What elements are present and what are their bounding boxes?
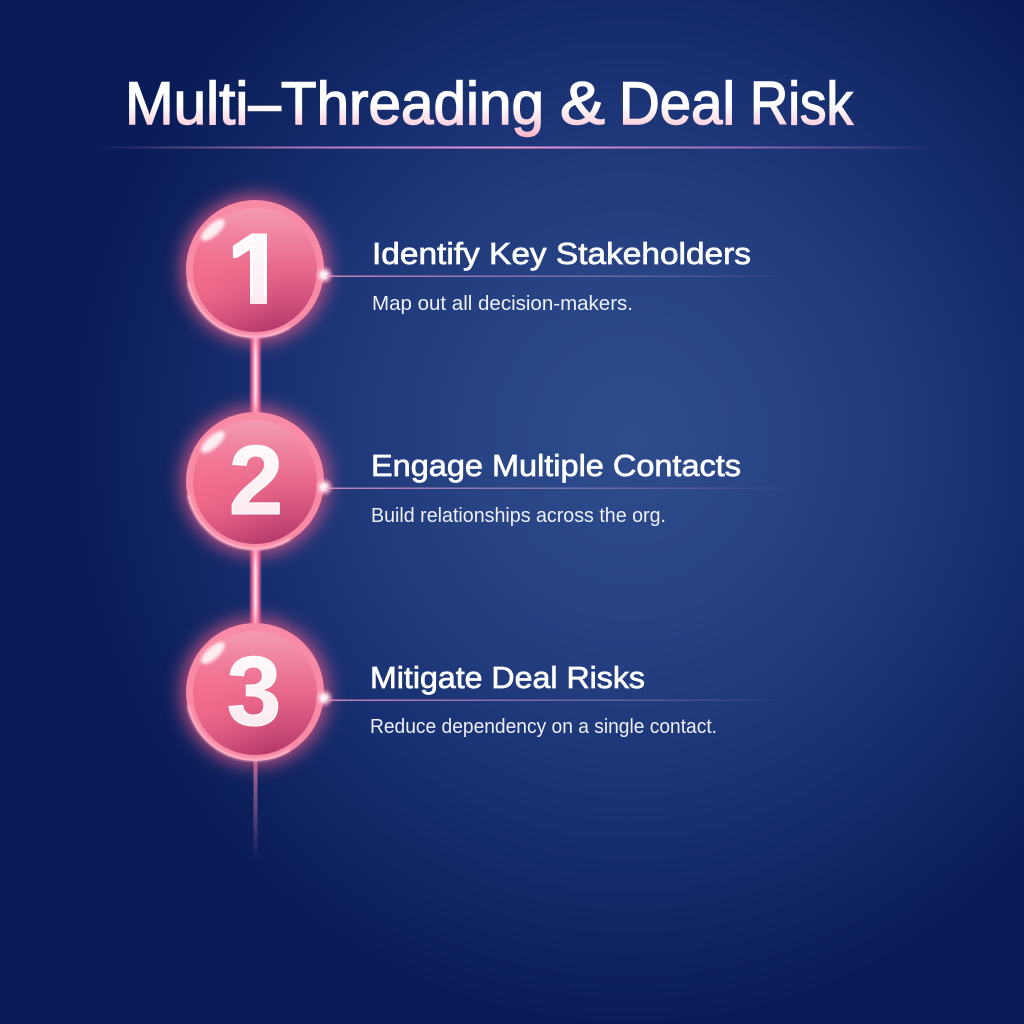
title: Multi–Threading xyxy=(125,70,544,137)
number 1: 1 xyxy=(227,213,285,328)
heading 3: Mitigate Deal Risks xyxy=(370,660,645,695)
title: & xyxy=(560,70,605,137)
badge 3 xyxy=(186,623,334,761)
heading 1: Identify Key Stakeholders xyxy=(372,236,751,271)
step 2 xyxy=(181,407,790,555)
number 2: 2 xyxy=(229,425,283,535)
title: Deal xyxy=(619,70,735,137)
description 3: Reduce dependency on a single contact. xyxy=(370,715,717,738)
step 1 xyxy=(181,195,790,343)
description 1: Map out all decision-makers. xyxy=(372,292,633,315)
description 2: Build relationships across the org. xyxy=(371,504,666,527)
connector line 1 xyxy=(326,276,790,277)
title underline xyxy=(95,146,935,148)
badge 2 xyxy=(186,412,334,550)
connector: tail below step 3 xyxy=(254,760,258,860)
connector line 2 xyxy=(326,488,790,489)
glow 2 xyxy=(181,407,329,555)
title: Risk xyxy=(750,70,854,137)
connector line 3 xyxy=(326,700,790,701)
title xyxy=(125,70,854,137)
number 3: 3 xyxy=(227,636,281,746)
step 3 xyxy=(181,618,790,766)
glow 3 xyxy=(181,618,329,766)
badge 1 xyxy=(186,200,334,338)
heading 2: Engage Multiple Contacts xyxy=(371,448,741,483)
connector: step 2 to step 3 xyxy=(249,547,262,627)
connector: step 1 to step 2 xyxy=(249,336,262,416)
glow 1 xyxy=(181,195,329,343)
